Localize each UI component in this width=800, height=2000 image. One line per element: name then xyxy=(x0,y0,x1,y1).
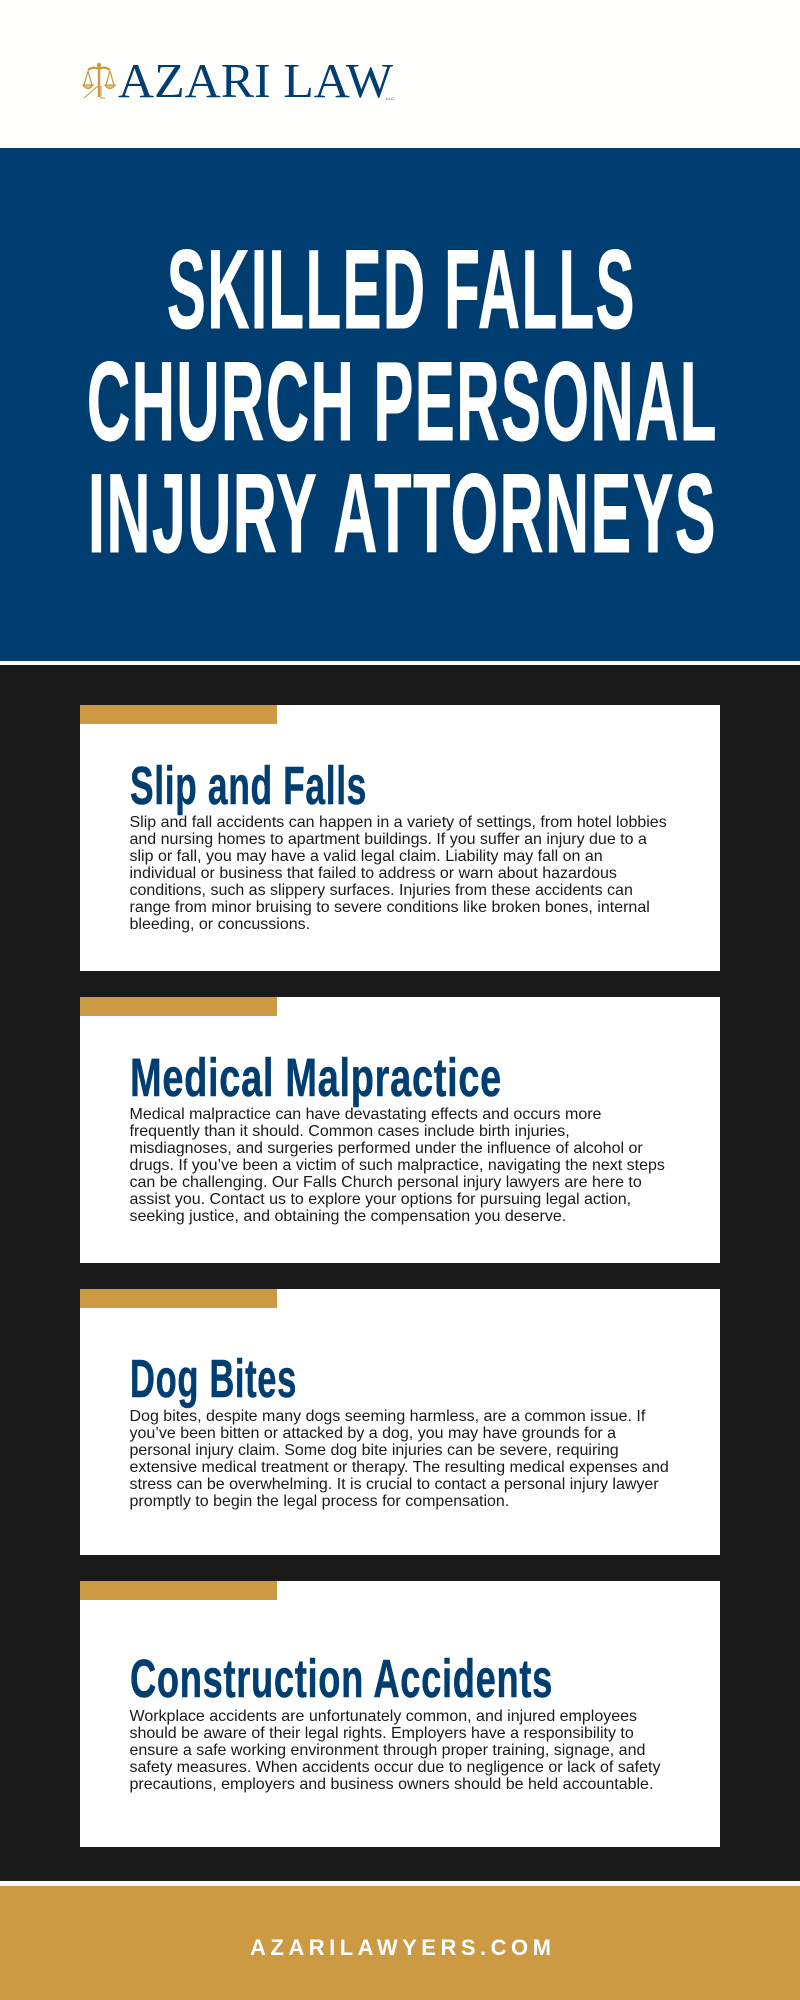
body text: individual or business that failed to address or warn about hazardous xyxy=(130,865,617,882)
body text: you’ve been bitten or attacked by a dog, you may have grounds for a xyxy=(130,1425,616,1442)
body text: extensive medical treatment or therapy. The resulting medical expenses and xyxy=(130,1459,669,1476)
body text: and nursing homes to apartment buildings. If you suffer an injury due to a xyxy=(130,831,647,848)
body text: slip or fall, you may have a valid legal claim. Liability may fall on an xyxy=(130,848,603,865)
body text: Slip and fall accidents can happen in a variety of settings, from hotel lobbies xyxy=(130,814,667,831)
body text: precautions, employers and business owners should be held accountable. xyxy=(130,1776,653,1793)
footer band xyxy=(0,1886,800,2000)
accent bar xyxy=(80,1289,277,1308)
body text: Workplace accidents are unfortunately common, and injured employees xyxy=(130,1708,637,1725)
website url: AZARILAWYERS.COM xyxy=(250,1935,551,1960)
body text xyxy=(130,1106,665,1225)
dark content background xyxy=(0,665,800,1881)
heading: Construction Accidents xyxy=(130,1649,553,1709)
header banner xyxy=(0,148,800,661)
body text xyxy=(130,1708,660,1793)
heading: Dog Bites xyxy=(130,1349,297,1409)
body text: frequently than it should. Common cases include birth injuries, xyxy=(130,1123,570,1140)
logo wordmark: AZARI LAW xyxy=(118,53,394,108)
panel: construction accidents xyxy=(80,1581,720,1847)
body text: ensure a safe working environment through proper training, signage, and xyxy=(130,1742,645,1759)
accent bar xyxy=(80,1581,277,1600)
body text: seeking justice, and obtaining the compensation you deserve. xyxy=(130,1208,566,1225)
body text: bleeding, or concussions. xyxy=(130,916,310,933)
panel: medical malpractice xyxy=(80,997,720,1263)
body text: conditions, such as slippery surfaces. Injuries from these accidents can xyxy=(130,882,633,899)
accent bar xyxy=(80,997,277,1016)
accent bar xyxy=(80,705,277,724)
title xyxy=(87,227,718,576)
body text: can be challenging. Our Falls Church personal injury lawyers are here to xyxy=(130,1174,642,1191)
body text: drugs. If you’ve been a victim of such malpractice, navigating the next steps xyxy=(130,1157,665,1174)
panel: slip and falls xyxy=(80,705,720,971)
icon: scales of justice xyxy=(83,63,115,98)
logo xyxy=(83,53,394,108)
body text xyxy=(130,1408,669,1510)
body text: Dog bites, despite many dogs seeming harmless, are a common issue. If xyxy=(130,1408,646,1425)
body text xyxy=(130,814,667,933)
panel: dog bites xyxy=(80,1289,720,1555)
body text: misdiagnoses, and surgeries performed under the influence of alcohol or xyxy=(130,1140,643,1157)
body text: safety measures. When accidents occur due to negligence or lack of safety xyxy=(130,1759,660,1776)
logo suffix: LLC xyxy=(386,96,394,101)
body text: stress can be overwhelming. It is crucial to contact a personal injury lawyer xyxy=(130,1476,659,1493)
body text: promptly to begin the legal process for compensation. xyxy=(130,1493,509,1510)
heading: Slip and Falls xyxy=(130,756,367,816)
body text: should be aware of their legal rights. Employers have a responsibility to xyxy=(130,1725,634,1742)
body text: personal injury claim. Some dog bite injuries can be severe, requiring xyxy=(130,1442,619,1459)
heading: Medical Malpractice xyxy=(130,1048,502,1108)
body text: assist you. Contact us to explore your options for pursuing legal action, xyxy=(130,1191,631,1208)
body text: Medical malpractice can have devastating effects and occurs more xyxy=(130,1106,602,1123)
body text: range from minor bruising to severe conditions like broken bones, internal xyxy=(130,899,650,916)
